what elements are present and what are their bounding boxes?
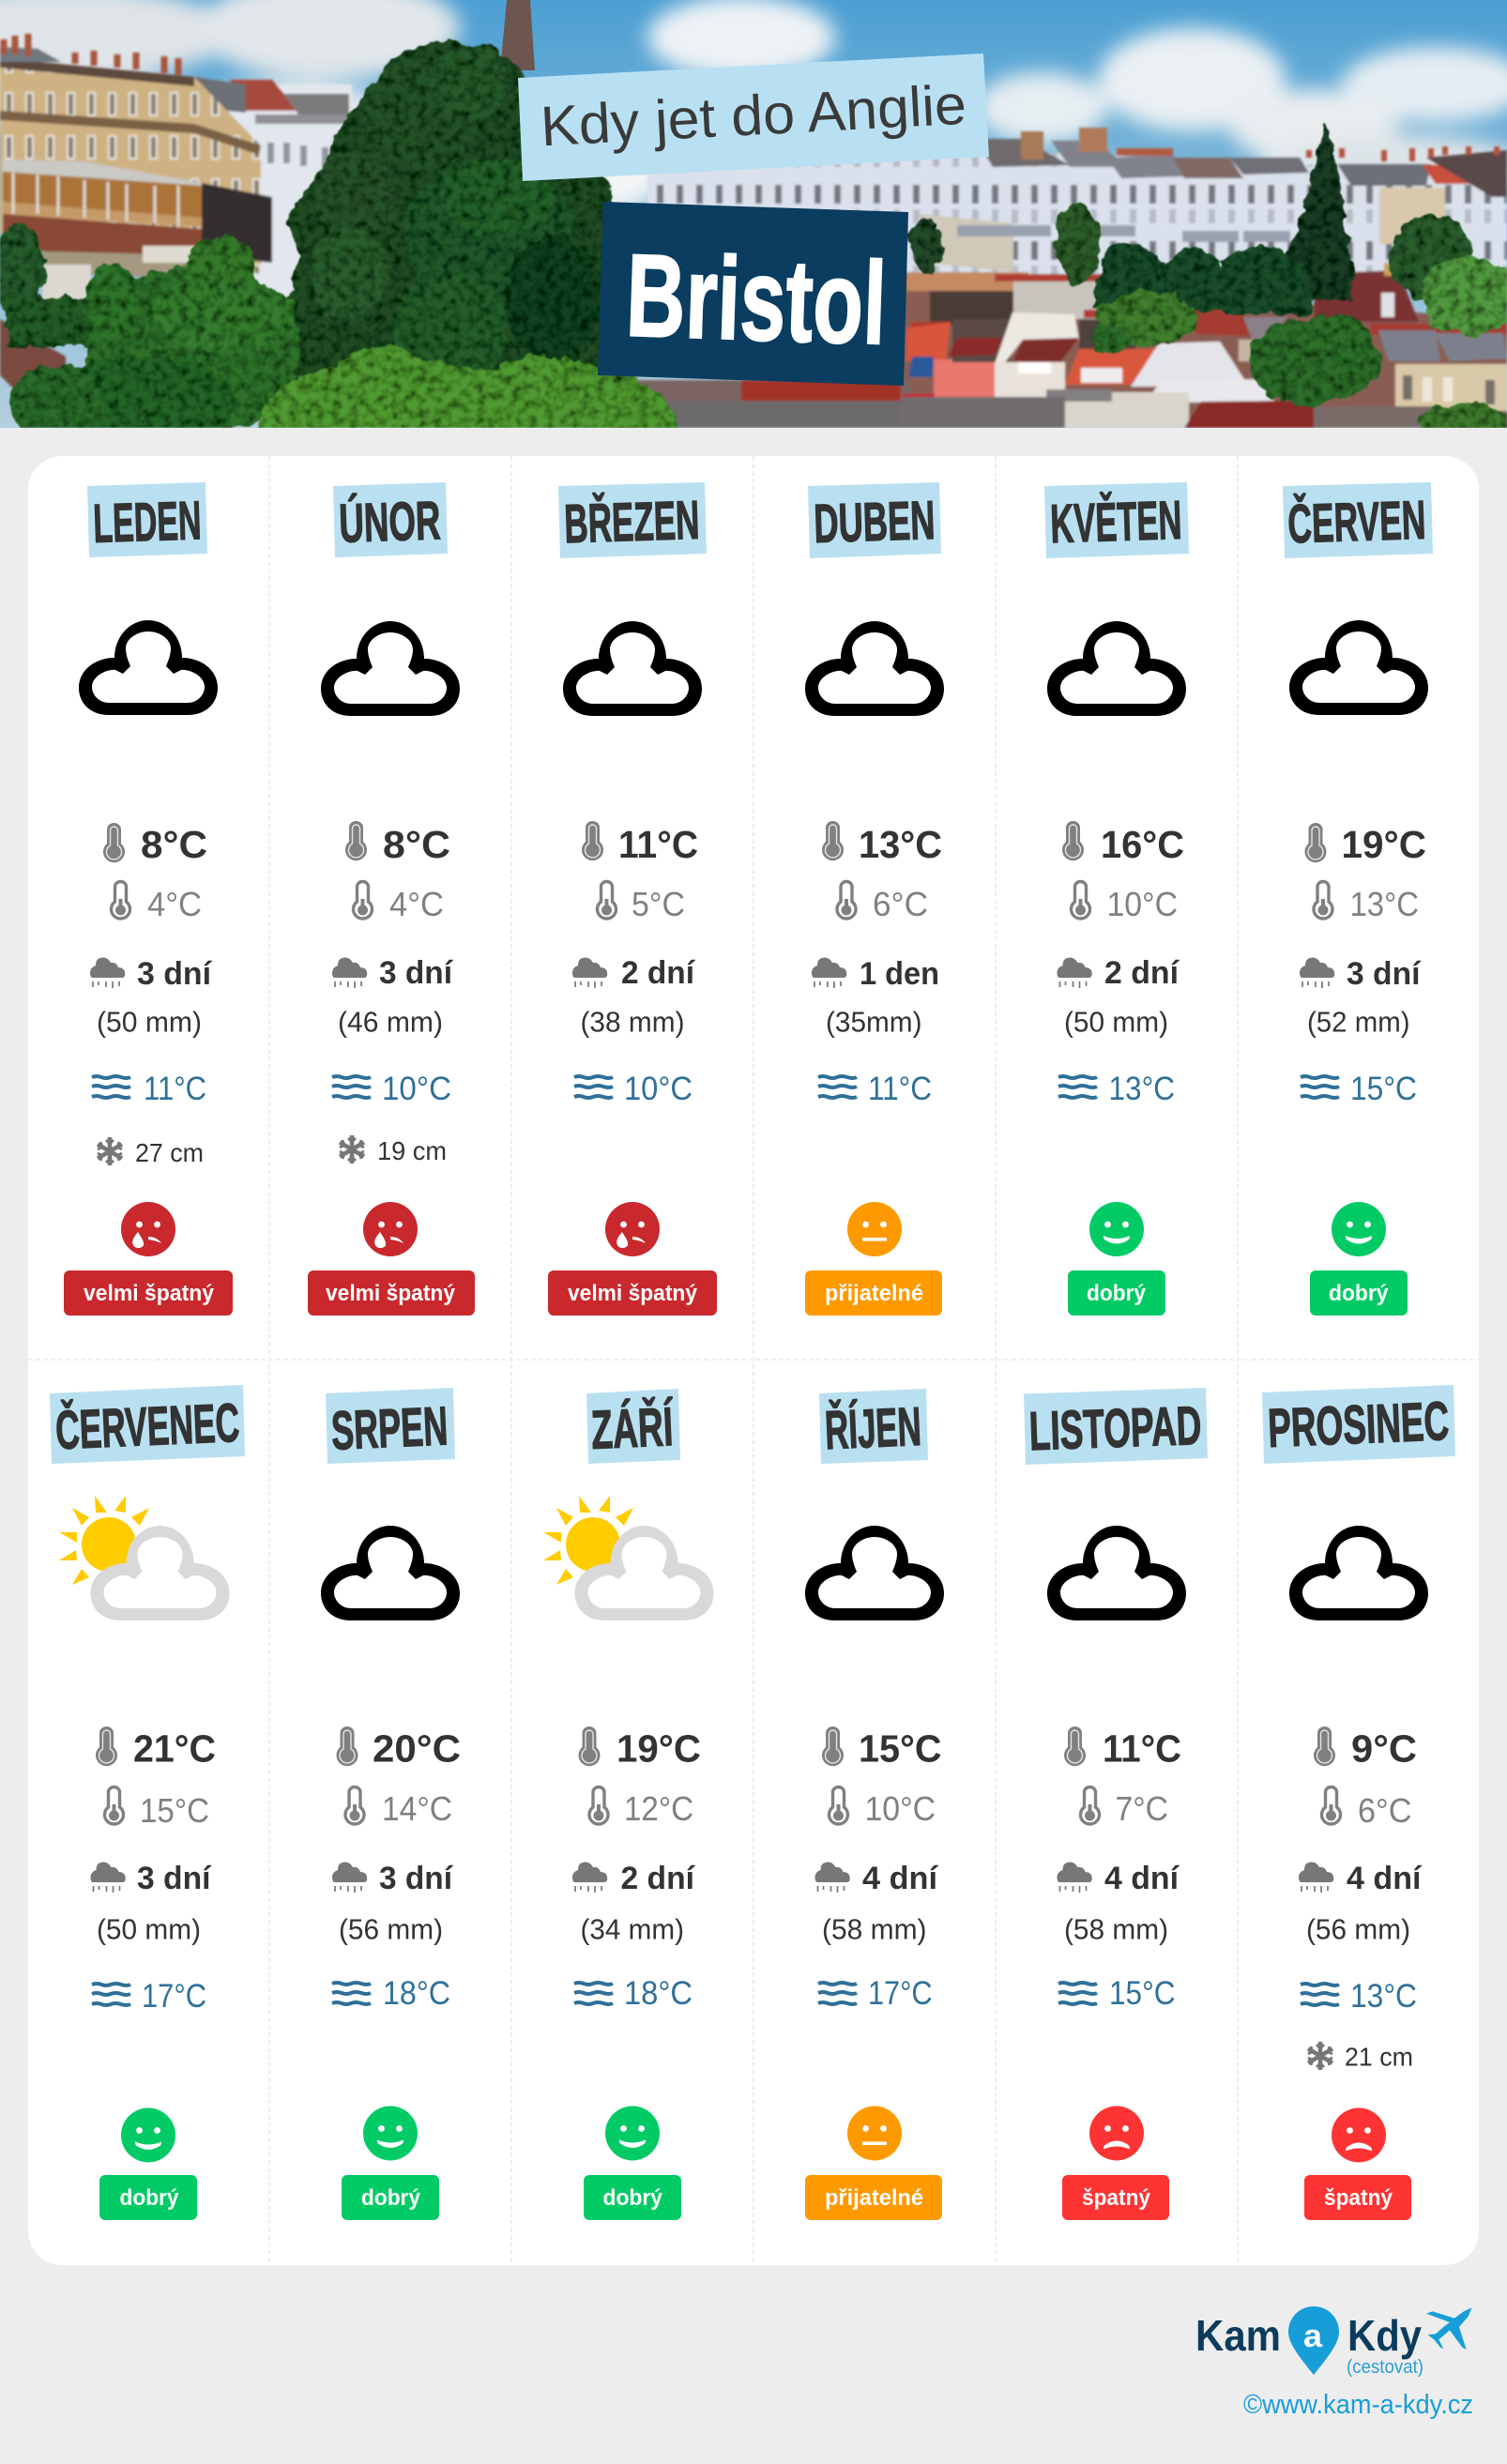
icon: cloud [321, 621, 460, 716]
rating face [605, 2106, 660, 2160]
icon: cloud [805, 621, 944, 716]
icon: map pin [1288, 2306, 1339, 2375]
panel: DUBEN [805, 482, 944, 1316]
max temperature [103, 823, 207, 866]
logo: Kam a Kdy: (cestovat) [1347, 2357, 1423, 2378]
max temperature [1062, 821, 1184, 866]
left foreground trees [0, 223, 44, 321]
max temperature: 16°C [1101, 823, 1184, 866]
logo: Kam a Kdy: Kdy [1347, 2311, 1422, 2360]
sea temperature: 11°C [144, 1071, 206, 1107]
sea temperature [332, 1071, 451, 1107]
sea temperature: 15°C [1350, 1071, 1417, 1107]
precipitation: (50 mm) [97, 1912, 201, 1946]
right lower houses base [891, 272, 1507, 428]
rating face [847, 1202, 902, 1256]
rain days: 1 den [860, 956, 939, 992]
min temperature [111, 882, 202, 923]
rain days [812, 956, 939, 992]
rating badge [64, 1270, 233, 1316]
panel: ČERVEN [1283, 482, 1433, 1316]
sea temperature [1301, 1071, 1417, 1107]
sea temperature [818, 1071, 932, 1107]
bright bottom trees [257, 342, 679, 428]
rating badge: dobrý [1087, 1281, 1147, 1306]
header photo: Bristol terraces and trees [0, 0, 1507, 450]
icon: cloud [1289, 1526, 1428, 1620]
precipitation: (56 mm) [1306, 1912, 1410, 1946]
panel: ČERVENEC [50, 1385, 245, 2220]
sea temperature [92, 1071, 206, 1107]
sea temperature: 18°C [383, 1975, 450, 2012]
icon: map pin: a [1303, 2319, 1323, 2354]
month label: BŘEZEN [563, 490, 700, 555]
min temperature [837, 882, 928, 923]
sea temperature [574, 1071, 693, 1107]
panel: SRPEN [321, 1388, 461, 2220]
panel: LISTOPAD [1024, 1388, 1208, 2220]
rating badge: velmi špatný [568, 1281, 698, 1306]
spire [500, 0, 535, 70]
rain days: 2 dní [621, 955, 696, 991]
rating badge: dobrý [361, 2185, 421, 2211]
max temperature [336, 1726, 461, 1770]
min temperature [353, 882, 444, 923]
rating badge [548, 1270, 717, 1316]
rain days [1057, 1861, 1180, 1896]
icon: cloud [79, 620, 218, 715]
precipitation: (58 mm) [822, 1912, 927, 1946]
rain days [90, 1861, 212, 1896]
rating face [363, 2106, 418, 2160]
rating face [1089, 1202, 1144, 1256]
rain days: 3 dní [1347, 956, 1422, 992]
rating badge: dobrý [120, 2185, 179, 2211]
sea temperature [1058, 1975, 1175, 2012]
sea temperature [332, 1975, 450, 2012]
month label: ČERVENEC [54, 1392, 240, 1461]
logo: Kam a Kdy [1195, 2306, 1471, 2378]
snow: 27 cm [135, 1138, 204, 1167]
title label: Kdy jet do Anglie [518, 53, 989, 181]
month label [50, 1385, 245, 1464]
rating badge: dobrý [602, 2185, 663, 2211]
min temperature [105, 1787, 209, 1830]
sea temperature: 13°C [1109, 1071, 1175, 1107]
copyright URL: ©www.kam-a-kdy.cz [1243, 2390, 1473, 2420]
rain days: 4 dní [1104, 1861, 1180, 1896]
left crescent building [0, 58, 261, 274]
month label: SRPEN [330, 1395, 449, 1462]
precipitation: (46 mm) [338, 1006, 443, 1038]
rating face [121, 2107, 175, 2162]
title label: Bristol [598, 202, 908, 386]
sea temperature: 11°C [868, 1071, 932, 1107]
month label [808, 482, 941, 558]
max temperature: 11°C [618, 823, 698, 866]
min temperature: 4°C [147, 885, 202, 923]
min temperature [1321, 1787, 1411, 1830]
rain days [1057, 955, 1180, 991]
rain days [332, 1861, 454, 1896]
min temperature: 6°C [873, 885, 928, 923]
min temperature: 10°C [865, 1789, 936, 1828]
rain days: 2 dní [621, 1861, 696, 1896]
panel: ZÁŘÍ [543, 1389, 713, 2220]
rating badge [308, 1270, 475, 1316]
min temperature: 13°C [1349, 885, 1419, 923]
max temperature: 15°C [859, 1726, 942, 1770]
month label [87, 482, 207, 557]
min temperature: 7°C [1115, 1789, 1168, 1828]
month label [333, 482, 448, 557]
month label: LISTOPAD [1028, 1395, 1202, 1462]
panel: ŘÍJEN [805, 1389, 944, 2220]
sea temperature: 10°C [624, 1071, 693, 1107]
precipitation: (52 mm) [1307, 1006, 1409, 1038]
rating badge [99, 2175, 197, 2220]
panel: KVĚTEN [1044, 482, 1189, 1316]
bank [0, 318, 68, 389]
rating badge [584, 2175, 681, 2220]
terrace trees [1288, 122, 1353, 300]
sea temperature [1058, 1071, 1175, 1107]
month label [586, 1389, 680, 1464]
rating badge: velmi špatný [326, 1281, 456, 1306]
snow: 21 cm [1345, 2042, 1413, 2072]
rain days: 3 dní [379, 955, 454, 991]
min temperature: 6°C [1358, 1791, 1411, 1830]
sea temperature: 13°C [1350, 1978, 1417, 2015]
icon: sun and cloud [59, 1496, 229, 1620]
max temperature: 19°C [1342, 823, 1426, 866]
icon: cloud [563, 621, 702, 716]
precipitation: (50 mm) [1064, 1006, 1168, 1038]
min temperature [1314, 882, 1419, 923]
rain days [572, 955, 696, 991]
rain days: 4 dní [1347, 1861, 1423, 1896]
min temperature [589, 1787, 693, 1828]
max temperature: 13°C [859, 823, 942, 866]
rain days: 3 dní [137, 1861, 212, 1896]
precipitation: (38 mm) [580, 1006, 685, 1038]
title label: Kdy jet do Anglie: Kdy jet do Anglie [539, 73, 967, 158]
rating face [847, 2106, 902, 2160]
rating face [1332, 2107, 1386, 2162]
icon: cloud [1289, 620, 1428, 715]
snow [1308, 2042, 1413, 2072]
month label [1024, 1388, 1208, 1465]
right white terrace [647, 150, 1507, 291]
rating face [1332, 1202, 1386, 1256]
icon: cloud [1047, 621, 1186, 716]
sea temperature: 10°C [382, 1071, 451, 1107]
max temperature [1314, 1726, 1417, 1770]
max temperature [1304, 823, 1426, 866]
max temperature: 8°C [383, 823, 450, 866]
max temperature [1064, 1726, 1181, 1770]
panel: BŘEZEN [548, 482, 717, 1316]
icon: sun and cloud [543, 1496, 713, 1620]
rating badge: přijatelné [825, 2185, 923, 2211]
panel: LEDEN [64, 482, 233, 1316]
month label [819, 1389, 928, 1464]
min temperature [345, 1787, 452, 1828]
precipitation: (56 mm) [339, 1912, 443, 1946]
panel: ÚNOR [308, 482, 475, 1316]
rating badge [1062, 2175, 1169, 2220]
rating face [363, 1202, 418, 1256]
rating badge [1068, 1270, 1165, 1316]
rating face [1089, 2106, 1144, 2160]
icon: cloud [805, 1526, 944, 1620]
min temperature [1072, 882, 1178, 923]
min temperature: 4°C [389, 885, 444, 923]
month label: ZÁŘÍ [590, 1396, 676, 1461]
rating badge [805, 1270, 942, 1316]
icon: cloud [1047, 1526, 1186, 1620]
sea temperature: 17°C [142, 1978, 206, 2015]
rain days: 4 dní [862, 1861, 939, 1896]
max temperature [582, 821, 698, 866]
sea temperature: 15°C [1109, 1975, 1175, 2012]
rating face [605, 1202, 660, 1256]
month label [326, 1388, 455, 1464]
max temperature: 19°C [616, 1726, 701, 1770]
rating badge: špatný [1324, 2185, 1393, 2211]
rain days [90, 956, 213, 992]
max temperature: 20°C [373, 1726, 461, 1770]
rain days [332, 955, 454, 991]
snow [98, 1137, 204, 1167]
sea temperature: 17°C [868, 1975, 933, 2012]
large dark central tree [285, 38, 614, 381]
month label: ÚNOR [338, 490, 441, 555]
max temperature: 9°C [1351, 1726, 1417, 1770]
max temperature [345, 821, 450, 866]
rating badge: špatný [1082, 2185, 1151, 2211]
rain days: 2 dní [1104, 955, 1180, 991]
logo: Kam a Kdy: Kam [1195, 2311, 1281, 2360]
min temperature: 14°C [382, 1789, 452, 1828]
icon: plane [1426, 2307, 1471, 2350]
snow [340, 1135, 447, 1165]
rating badge [1310, 1270, 1408, 1316]
rating badge [805, 2175, 942, 2220]
white building behind left crescent [229, 83, 353, 298]
sea temperature [818, 1975, 933, 2012]
rating face [121, 1202, 175, 1256]
min temperature [1081, 1787, 1168, 1828]
precipitation: (34 mm) [580, 1912, 684, 1946]
rating badge [342, 2175, 439, 2220]
month label: DUBEN [813, 490, 936, 555]
precipitation: (35mm) [826, 1006, 921, 1038]
sea temperature [574, 1975, 693, 2012]
precipitation: (58 mm) [1064, 1912, 1168, 1946]
max temperature: 8°C [141, 823, 207, 866]
max temperature [578, 1726, 701, 1770]
max temperature [822, 821, 942, 866]
title label: Bristol: Bristol [624, 230, 889, 370]
month label: LEDEN [92, 490, 202, 555]
panel: PROSINEC [1262, 1385, 1455, 2220]
precipitation: (50 mm) [97, 1006, 202, 1038]
month label: KVĚTEN [1049, 490, 1182, 555]
snow: 19 cm [377, 1136, 447, 1165]
max temperature: 11°C [1103, 1726, 1181, 1770]
rating badge: velmi špatný [84, 1281, 215, 1306]
max temperature [96, 1726, 216, 1770]
month label [558, 482, 707, 558]
min temperature: 5°C [632, 885, 685, 923]
min temperature: 12°C [624, 1789, 693, 1828]
rain days: 3 dní [137, 956, 213, 992]
rating badge [1304, 2175, 1411, 2220]
min temperature [597, 882, 685, 923]
rain days [572, 1861, 696, 1896]
rating badge: dobrý [1329, 1281, 1389, 1306]
rain days [814, 1861, 939, 1896]
min temperature [830, 1787, 936, 1828]
sea temperature [1301, 1978, 1417, 2015]
month label: ŘÍJEN [824, 1396, 922, 1461]
min temperature: 10°C [1107, 885, 1178, 923]
rain days: 3 dní [379, 1861, 454, 1896]
sea temperature [92, 1978, 206, 2015]
sea temperature: 18°C [624, 1975, 693, 2012]
min temperature: 15°C [140, 1791, 209, 1830]
rain days [1299, 1861, 1423, 1896]
max temperature: 21°C [133, 1726, 216, 1770]
month label [1044, 482, 1189, 558]
rain days [1300, 956, 1422, 992]
rating badge: přijatelné [825, 1281, 923, 1306]
max temperature [822, 1726, 942, 1770]
icon: cloud [321, 1526, 460, 1620]
month label [1283, 482, 1433, 558]
panel: calendar card [28, 456, 1479, 2265]
